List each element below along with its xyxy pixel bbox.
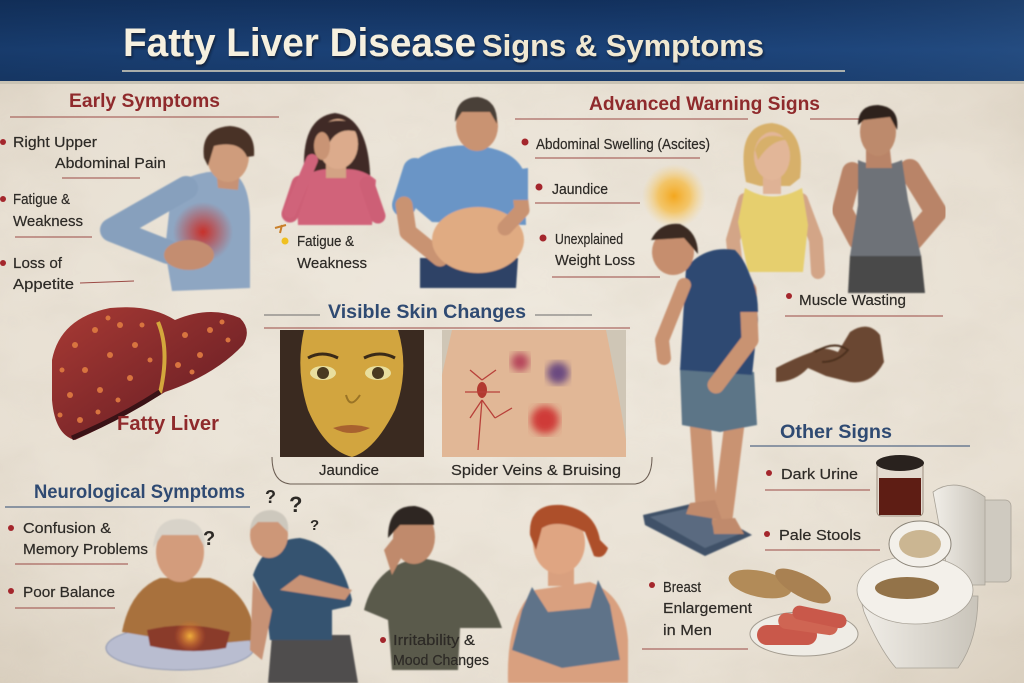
panel: visible skin changes <box>264 302 652 484</box>
question marks: ? <box>203 528 215 550</box>
heading: other signs: Other Signs <box>780 422 892 443</box>
warning list <box>522 136 710 277</box>
neuro list: Memory Problems <box>23 541 148 558</box>
bullet: irritability <box>380 632 489 669</box>
bullet: fatigue and weakness <box>275 225 367 272</box>
signs list <box>764 466 880 550</box>
bullet text <box>642 579 753 649</box>
icon: wasted muscle <box>776 327 884 382</box>
panel: advanced warning signs <box>515 94 943 382</box>
symptom list: Appetite <box>13 276 74 293</box>
bullet: muscle wasting: Muscle Wasting <box>799 292 906 309</box>
panel: early symptoms <box>0 91 528 293</box>
symptom list <box>0 134 166 293</box>
symptom list: Abdominal Pain <box>55 155 166 172</box>
bullet: irritability: Mood Changes <box>393 652 489 669</box>
symptom list: Loss of <box>13 255 63 272</box>
icon: toilet <box>857 485 1011 668</box>
illustration: irritable man <box>364 506 502 670</box>
bullet text: in Men <box>663 622 712 639</box>
title: Fatty Liver Disease <box>123 21 476 65</box>
neuro list: Confusion & <box>23 520 111 537</box>
bullet text: Breast <box>663 579 702 596</box>
illustration: woman with headache <box>290 113 378 225</box>
question marks <box>203 487 319 550</box>
bullet: muscle wasting <box>785 292 943 316</box>
symptom list: Fatigue & <box>13 191 70 208</box>
icon: food plate <box>726 562 858 656</box>
neuro list <box>8 520 148 608</box>
illustration: muscular man <box>842 105 936 293</box>
heading: neurological symptoms: Neurological Symptoms <box>34 482 245 503</box>
caption: jaundice: Jaundice <box>319 462 379 479</box>
heading: visible skin changes: Visible Skin Changes <box>328 302 526 323</box>
bullet: fatigue and weakness: Fatigue & <box>297 233 354 250</box>
illustration: woman in sports top <box>508 505 628 683</box>
signs list: Pale Stools <box>779 527 861 544</box>
question marks: ? <box>310 517 319 534</box>
photo: spider veins and bruising <box>442 330 626 457</box>
caption: spider veins: Spider Veins & Bruising <box>451 462 621 479</box>
panel: neurological symptoms <box>5 482 502 683</box>
icon: jaundice sun <box>642 164 706 228</box>
bullet: fatigue and weakness: Weakness <box>297 255 367 272</box>
illustration: confused older man <box>106 519 256 670</box>
bullet: irritability: Irritability & <box>393 632 475 649</box>
warning list: Abdominal Swelling (Ascites) <box>536 136 710 153</box>
illustration: man holding abdomen <box>112 126 254 291</box>
label: fatty liver: Fatty Liver <box>117 413 219 435</box>
symptom list: Weakness <box>13 213 83 230</box>
question marks: ? <box>265 487 276 507</box>
bullet text: Enlargement <box>663 600 753 617</box>
illustration: man on scale <box>643 224 758 556</box>
illustration: fatty liver <box>52 307 247 440</box>
panel: breast enlargement <box>508 505 858 683</box>
subtitle: Signs & Symptoms <box>482 28 764 63</box>
neuro list: Poor Balance <box>23 584 115 601</box>
heading: early symptoms: Early Symptoms <box>69 91 220 112</box>
illustration: man with swollen belly <box>404 97 528 288</box>
panel: other signs <box>750 422 1011 668</box>
photo: jaundiced face <box>280 330 424 457</box>
warning list: Jaundice <box>552 181 608 198</box>
icon: cup of dark urine <box>876 455 924 516</box>
illustration: older man with poor balance <box>250 510 358 683</box>
warning list: Unexplained <box>555 231 623 248</box>
question marks: ? <box>289 492 302 517</box>
illustration: blonde woman <box>733 123 818 272</box>
symptom list: Right Upper <box>13 134 97 151</box>
signs list: Dark Urine <box>781 466 858 483</box>
heading: advanced warning signs: Advanced Warning Signs <box>589 94 820 115</box>
bracket <box>272 457 652 484</box>
warning list: Weight Loss <box>555 252 635 269</box>
header banner <box>0 0 1024 84</box>
